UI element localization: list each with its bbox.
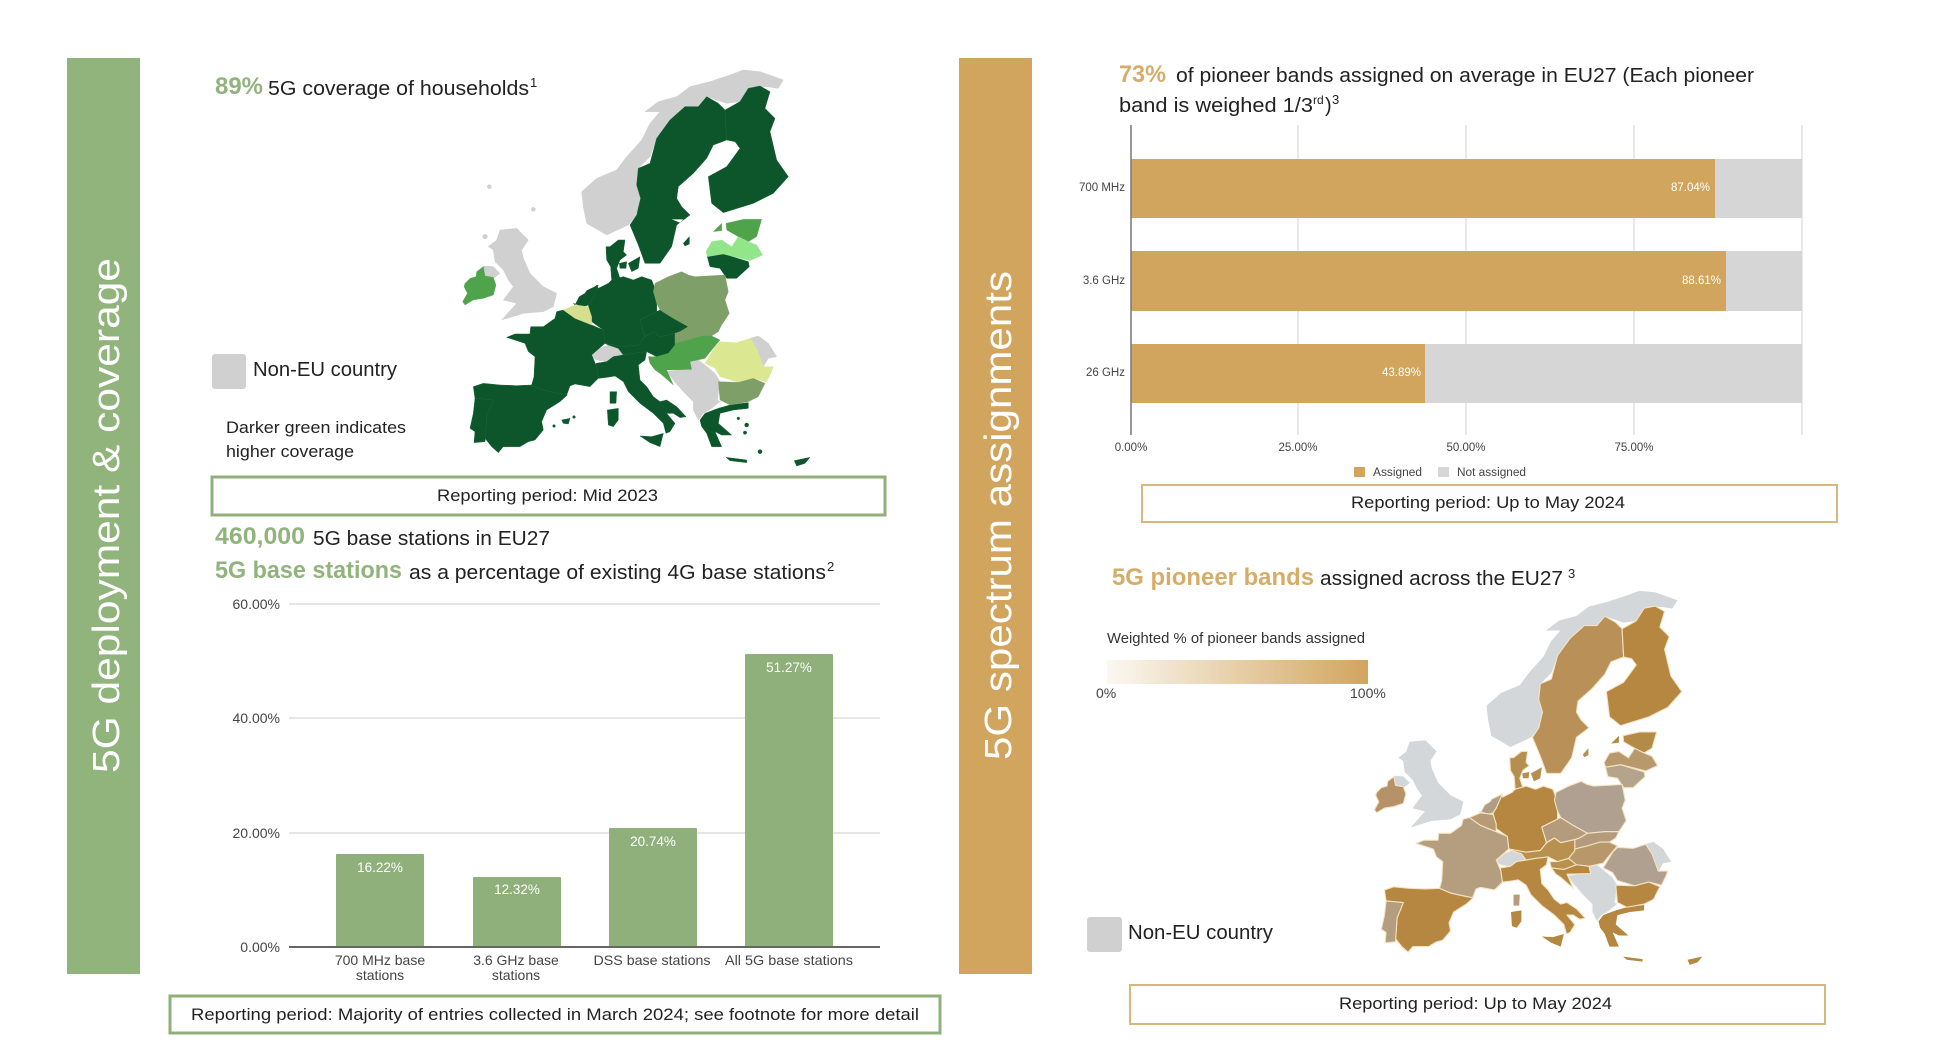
category labels xyxy=(335,952,853,983)
note: darker green: higher coverage xyxy=(226,442,354,461)
callout: reporting period May 2024 bottom xyxy=(1130,985,1825,1024)
panel: left band 5G deployment and coverage: 5G deployment & coverage xyxy=(86,258,128,773)
category labels: stations xyxy=(356,967,404,983)
note: darker green xyxy=(226,418,406,461)
bar values: 20.74% xyxy=(630,834,676,849)
legend: non-EU country: Non-EU country xyxy=(253,359,397,381)
note: darker green: Darker green indicates xyxy=(226,418,406,437)
y axis labels: 60.00% xyxy=(233,596,280,612)
x axis labels: 75.00% xyxy=(1614,442,1654,454)
heading: 460,000 5G base stations: 5G base stations in EU27 xyxy=(313,528,550,550)
x axis labels: 0.00% xyxy=(1115,442,1147,454)
bar values: 16.22% xyxy=(357,860,403,875)
EU countries shaded by weighted assignment xyxy=(1532,616,1624,773)
bar values xyxy=(1382,182,1721,379)
callout: reporting period May 2024 bottom: Reporting period: Up to May 2024 xyxy=(1339,994,1612,1013)
heading: 89% 5G coverage: 5G coverage of households xyxy=(268,78,529,100)
legend: non-EU country xyxy=(212,354,397,389)
heading: 5G base stations as percentage of 4G: 2 xyxy=(827,559,834,574)
bar values: 87.04% xyxy=(1671,182,1710,194)
category labels: stations xyxy=(492,967,540,983)
heading: 89% 5G coverage: 89% xyxy=(215,73,263,100)
bar values xyxy=(357,660,812,897)
heading: 89% 5G coverage xyxy=(215,73,537,100)
map: pioneer bands assigned xyxy=(1374,591,1702,965)
legend: weighted percentage gradient: 0% xyxy=(1096,685,1116,701)
band labels xyxy=(1079,182,1125,379)
callout: reporting period May 2024 top: Reporting period: Up to May 2024 xyxy=(1351,493,1625,512)
bars xyxy=(336,654,833,947)
heading: 73% of pioneer bands: rd xyxy=(1313,93,1324,107)
callout: reporting period mid 2023 xyxy=(212,477,885,515)
heading: 5G pioneer bands across EU27: assigned across the EU27 xyxy=(1320,568,1563,590)
x axis labels: 25.00% xyxy=(1278,442,1318,454)
non-EU countries in grey xyxy=(477,70,783,420)
legend: weighted percentage gradient xyxy=(1096,631,1386,701)
bar chart: base stations xyxy=(233,596,880,983)
heading: 5G pioneer bands across EU27: 3 xyxy=(1568,566,1575,581)
heading: 5G pioneer bands across EU27: 5G pioneer bands xyxy=(1112,564,1314,591)
callout: reporting period March 2024: Reporting period: Majority of entries collected in March 2024; see footnote for more detail xyxy=(191,1005,919,1024)
legend: weighted percentage gradient: 100% xyxy=(1350,685,1386,701)
x axis labels xyxy=(1115,442,1654,454)
bar values: 12.32% xyxy=(494,882,540,897)
bars xyxy=(1131,159,1802,403)
bar values: 88.61% xyxy=(1682,275,1721,287)
chart legend xyxy=(1354,467,1526,479)
heading: 5G base stations as percentage of 4G: 5G base stations xyxy=(215,557,402,584)
callout: reporting period mid 2023: Reporting period: Mid 2023 xyxy=(437,486,658,505)
panel: right band 5G spectrum assignments: 5G spectrum assignments xyxy=(978,271,1020,760)
heading: 73% of pioneer bands xyxy=(1119,61,1754,117)
chart legend: Assigned xyxy=(1373,467,1422,479)
map: 5G coverage of households xyxy=(463,70,810,466)
category labels: DSS base stations xyxy=(594,952,710,968)
heading: 73% of pioneer bands: ) xyxy=(1325,95,1332,117)
callout: reporting period May 2024 top xyxy=(1142,485,1837,522)
chart legend: Not assigned xyxy=(1457,467,1526,479)
non-EU countries in grey xyxy=(1388,591,1677,921)
legend: weighted percentage gradient: Weighted % of pioneer bands assigned xyxy=(1107,631,1365,647)
y axis labels: 20.00% xyxy=(233,825,280,841)
band labels: 26 GHz xyxy=(1086,367,1125,379)
y axis labels: 40.00% xyxy=(233,710,280,726)
legend: non-EU country lower: Non-EU country xyxy=(1128,922,1273,944)
band labels: 700 MHz xyxy=(1079,182,1125,194)
category labels: All 5G base stations xyxy=(725,952,853,968)
callout: reporting period March 2024 xyxy=(170,996,940,1033)
heading: 5G base stations as percentage of 4G: as a percentage of existing 4G base stations xyxy=(409,562,826,584)
category labels: 700 MHz base xyxy=(335,952,425,968)
y axis labels: 0.00% xyxy=(240,939,280,955)
x axis labels: 50.00% xyxy=(1446,442,1486,454)
heading: 73% of pioneer bands: 3 xyxy=(1332,92,1339,107)
heading: 73% of pioneer bands: 73% xyxy=(1119,61,1166,88)
band labels: 3.6 GHz xyxy=(1083,275,1125,287)
bar values: 43.89% xyxy=(1382,367,1421,379)
panel: left band 5G deployment and coverage xyxy=(67,58,140,974)
panel: right band 5G spectrum assignments xyxy=(959,58,1032,974)
heading: 460,000 5G base stations xyxy=(215,523,550,550)
legend: non-EU country lower xyxy=(1087,917,1273,952)
heading: 89% 5G coverage: 1 xyxy=(530,75,537,90)
bar values: 51.27% xyxy=(766,660,812,675)
heading: 73% of pioneer bands: of pioneer bands assigned on average in EU27 (Each pioneer xyxy=(1176,65,1754,87)
y axis labels xyxy=(233,596,280,955)
heading: 73% of pioneer bands: band is weighed 1/3 xyxy=(1119,95,1313,117)
EU countries shaded by coverage xyxy=(470,86,810,466)
category labels: 3.6 GHz base xyxy=(473,952,559,968)
stacked bar chart: pioneer bands assigned xyxy=(1079,125,1802,479)
heading: 460,000 5G base stations: 460,000 xyxy=(215,523,305,550)
heading: 5G base stations as percentage of 4G xyxy=(215,557,834,584)
heading: 5G pioneer bands across EU27 xyxy=(1112,564,1575,591)
